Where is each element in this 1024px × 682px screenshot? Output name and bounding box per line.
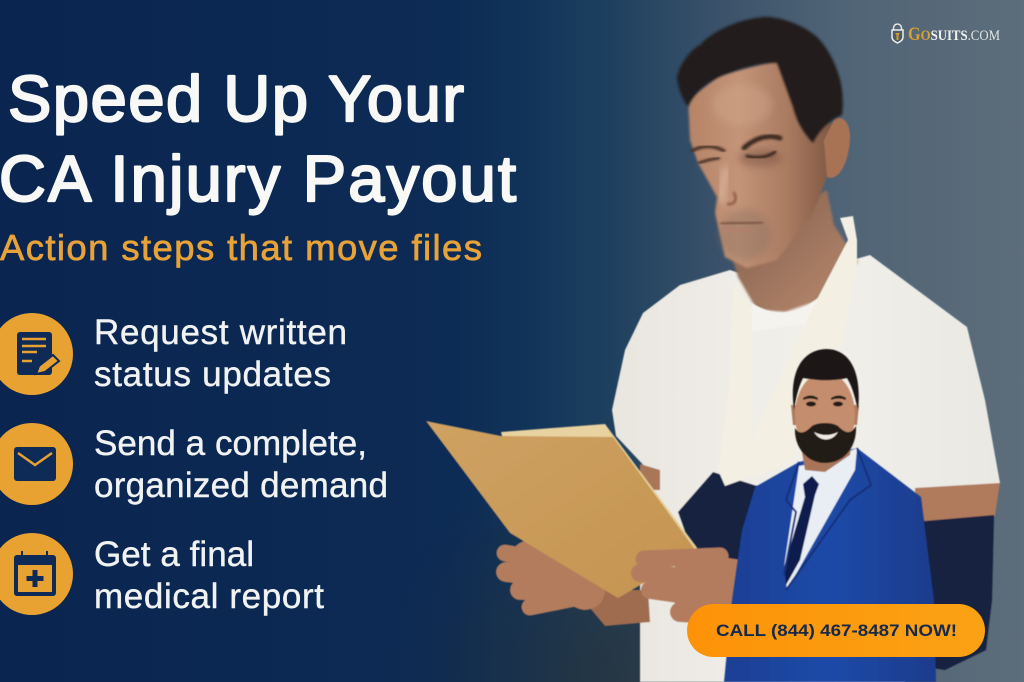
injured man photo xyxy=(426,17,1000,682)
forearm under left hand xyxy=(575,590,650,626)
forehead highlight xyxy=(712,85,772,125)
step 3 text: medical report xyxy=(94,577,324,616)
attorney portrait xyxy=(724,349,936,682)
face xyxy=(688,60,832,268)
icon: envelope xyxy=(0,423,73,505)
right arm and sling xyxy=(880,482,1000,670)
attorney beard xyxy=(795,423,856,463)
step 3 text xyxy=(94,535,324,616)
tan folder xyxy=(426,421,697,598)
attorney eyes xyxy=(803,396,846,406)
icon: document and pencil xyxy=(0,313,73,395)
title line 1: Speed Up Your xyxy=(8,62,464,135)
step 1 text xyxy=(94,313,347,394)
step 2 text: organized demand xyxy=(94,466,388,505)
icon: medical calendar xyxy=(0,533,73,615)
left arm skin xyxy=(640,464,660,490)
blue suit xyxy=(724,448,936,682)
right hand xyxy=(640,556,732,615)
eye socket shadow xyxy=(738,149,782,167)
left sling section xyxy=(678,472,770,600)
navy tie xyxy=(784,476,819,585)
icon: padlock shield xyxy=(892,24,903,43)
step 1 text: Request written xyxy=(94,313,347,352)
title xyxy=(0,62,516,215)
attorney hair xyxy=(793,349,859,410)
stubble and shadows xyxy=(719,209,771,261)
step 2: organized demand xyxy=(0,423,388,505)
step 3 text: Get a final xyxy=(94,535,254,574)
logo wordmark: GOSUITS.COM xyxy=(908,24,1000,45)
suit lapels xyxy=(784,448,871,590)
title line 2: CA Injury Payout xyxy=(0,142,516,215)
ear xyxy=(824,118,850,178)
attorney neck xyxy=(800,440,852,472)
subtitle: Action steps that move files xyxy=(0,227,482,268)
shirt collar xyxy=(752,296,830,332)
dark hair xyxy=(677,17,843,143)
logo: GoSuits.com xyxy=(892,24,1000,45)
step 2 text xyxy=(94,424,388,505)
white t-shirt xyxy=(612,255,1000,682)
step 1 text: status updates xyxy=(94,355,331,394)
eyes, brows, nose and mouth xyxy=(692,136,780,231)
left hand fingers xyxy=(505,553,585,607)
attorney ears xyxy=(791,405,859,425)
call to action button xyxy=(687,604,985,657)
call to action button: CALL (844) 467-8487 NOW! xyxy=(716,622,957,640)
step 2 text: Send a complete, xyxy=(94,424,367,463)
attorney face xyxy=(795,372,855,458)
arm sling strap xyxy=(718,216,857,486)
attorney smile xyxy=(814,432,838,440)
neck xyxy=(728,190,858,312)
step 3: final medical report xyxy=(0,533,324,616)
step 1: written status updates xyxy=(0,313,347,395)
white dress shirt xyxy=(784,448,857,590)
